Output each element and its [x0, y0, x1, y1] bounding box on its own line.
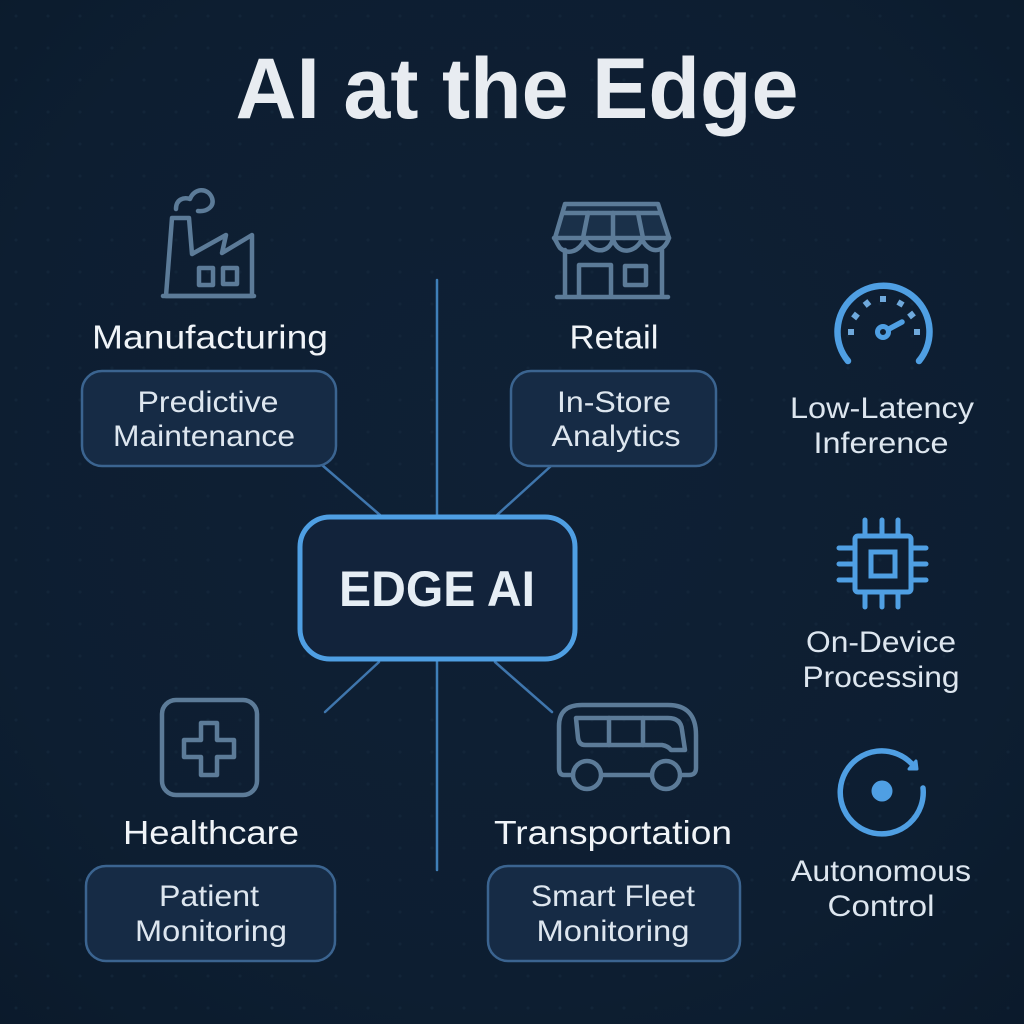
heading: Manufacturing: Manufacturing [92, 318, 328, 356]
feature: autonomous control [791, 751, 971, 923]
feature: on-device processing: Processing [802, 661, 960, 694]
central node: EDGE AI: EDGE AI [339, 561, 535, 617]
icon: bus [559, 705, 696, 789]
feature: autonomous control: Control [828, 890, 934, 923]
label: On-Device Processing: On-Device [806, 626, 956, 659]
icon: chip [839, 520, 926, 607]
icon: storefront [554, 204, 669, 297]
panel: manufacturing [82, 190, 336, 466]
heading: Retail: Retail [570, 318, 658, 356]
icon: factory [163, 190, 254, 296]
card: In-Store Analytics: In-Store [557, 386, 671, 419]
card: Patient Monitoring: Monitoring [135, 915, 287, 948]
panel: retail [511, 204, 716, 466]
feature: low-latency inference: Inference [814, 427, 948, 460]
card: Predictive Maintenance [82, 371, 336, 466]
title: AI at the Edge [236, 41, 798, 137]
card: Predictive Maintenance: Maintenance [113, 420, 295, 453]
card: Smart Fleet Monitoring: Smart Fleet [531, 880, 695, 913]
icon: medical cross [162, 700, 257, 795]
card: Patient Monitoring: Patient [159, 880, 259, 913]
panel: healthcare [86, 700, 335, 961]
feature: on-device processing [802, 520, 960, 694]
label: Autonomous Control: Autonomous [791, 855, 971, 888]
feature: low-latency inference [790, 286, 974, 460]
card: In-Store Analytics: Analytics [552, 420, 680, 453]
icon: rotating control [840, 751, 923, 834]
heading: Transportation: Transportation [494, 814, 732, 851]
card: In-Store Analytics [511, 371, 716, 466]
central node: EDGE AI [300, 517, 575, 659]
label: Low-Latency Inference: Low-Latency [790, 392, 974, 425]
heading: Healthcare: Healthcare [123, 814, 299, 851]
card: Patient Monitoring [86, 866, 335, 961]
card: Predictive Maintenance: Predictive [138, 386, 278, 419]
panel: transportation [488, 705, 740, 961]
card: Smart Fleet Monitoring [488, 866, 740, 961]
icon: gauge [838, 286, 930, 361]
card: Smart Fleet Monitoring: Monitoring [536, 915, 690, 948]
connector lines [322, 280, 552, 870]
